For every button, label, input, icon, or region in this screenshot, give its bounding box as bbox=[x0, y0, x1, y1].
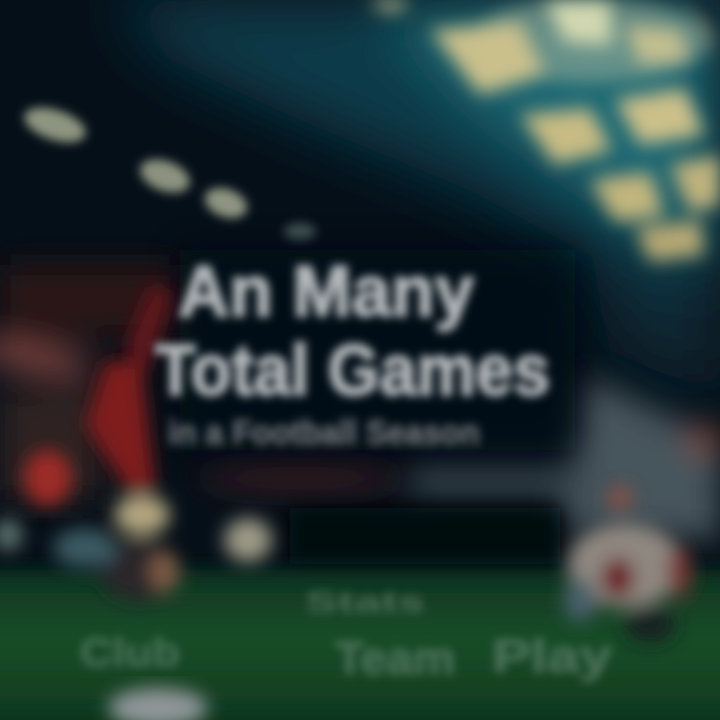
stands: grey right side bbox=[410, 375, 720, 540]
caption left: Club bbox=[80, 631, 180, 675]
heading line two: Total Games bbox=[155, 331, 550, 411]
heading line one: An Many bbox=[178, 252, 474, 332]
crowd: red stands at left bbox=[0, 265, 405, 500]
caption: faint labels on pitch bbox=[80, 586, 613, 684]
dark banner: below heading bbox=[290, 508, 560, 564]
ball: pale shape on pitch bbox=[108, 688, 208, 720]
subtitle: in a Football Season bbox=[168, 414, 480, 452]
title panel: dark block behind heading bbox=[180, 250, 575, 450]
caption centre: Team bbox=[335, 632, 455, 684]
caption right: Play bbox=[492, 630, 613, 682]
stadium roof: teal canopy bbox=[110, 0, 720, 400]
caption top: Stats bbox=[305, 586, 425, 619]
player: red kit at left bbox=[0, 285, 272, 600]
floodlights: glowing roof panels bbox=[372, 0, 720, 262]
pitch: green grass bbox=[0, 570, 720, 720]
floodlights: row of small lights at left bbox=[20, 101, 316, 241]
heading: title text bbox=[155, 252, 550, 411]
player: white and red kit at right bbox=[564, 486, 692, 643]
